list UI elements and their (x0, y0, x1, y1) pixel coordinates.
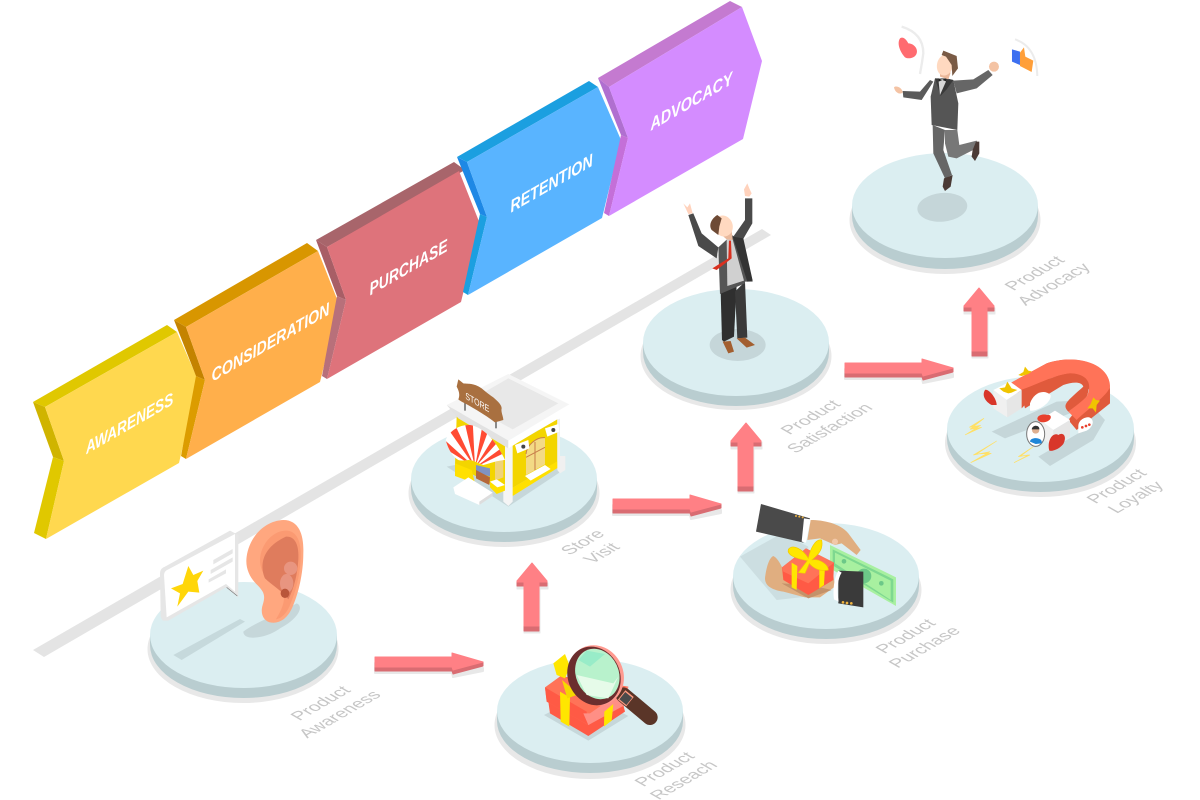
label: store visit: Store (556, 527, 609, 557)
platform: product loyalty (945, 376, 1136, 497)
arrow: research to store (517, 563, 548, 633)
stage banner: advocacy: ADVOCACY (649, 67, 735, 135)
icon: store building: STORE (465, 391, 489, 414)
stage banner: retention: RETENTION (509, 150, 594, 217)
icon: hands exchanging money for gift (740, 504, 896, 607)
label: product awareness: Awareness (293, 687, 386, 741)
stage banner: awareness (33, 325, 198, 539)
platform: store visit (408, 426, 600, 547)
stage banner: consideration (174, 243, 339, 459)
label: product loyalty: Product (1082, 466, 1151, 506)
icon: jumping businessman with heart and thumbs up (894, 27, 1037, 224)
stage banner: purchase (316, 162, 480, 379)
timeline road (33, 229, 771, 657)
platform: product research (494, 659, 686, 779)
stage banner: advocacy (598, 1, 762, 216)
stage banner: consideration: CONSIDERATION (211, 299, 331, 386)
label: product awareness (274, 676, 386, 741)
label: product awareness: Product (286, 683, 355, 723)
label: store visit: Visit (579, 540, 624, 566)
label: product purchase: Purchase (884, 624, 965, 670)
label: product advocacy: Product (1000, 253, 1069, 293)
label: product loyalty (1082, 466, 1170, 517)
label: product satisfaction: Product (776, 397, 845, 437)
icon: store building (446, 374, 569, 506)
label: product purchase: Product (871, 616, 940, 656)
label: product advocacy: Advocacy (1012, 260, 1095, 308)
label: product research: Product (630, 749, 699, 789)
icon: ear with star review card (160, 520, 303, 660)
label: product research (626, 747, 722, 800)
icon: horseshoe magnet attracting customers (965, 359, 1110, 466)
arrow: loyalty to advocacy (964, 288, 995, 358)
arrow: store to purchase (613, 495, 721, 519)
platform: product satisfaction (640, 289, 832, 410)
label: product advocacy (993, 249, 1095, 308)
label: product satisfaction (763, 389, 877, 456)
arrow: purchase to satisfaction (731, 423, 762, 493)
label: product purchase (865, 613, 965, 670)
label: store visit (556, 527, 628, 568)
stage banner: awareness: AWARENESS (84, 388, 175, 459)
label: product loyalty: Loyalty (1103, 478, 1168, 516)
icon: gift under magnifying glass (544, 636, 650, 741)
label: product satisfaction: Satisfaction (782, 400, 877, 456)
platform: product awareness (148, 582, 338, 703)
platform: product purchase (730, 523, 922, 644)
stage banner: purchase: PURCHASE (369, 235, 449, 299)
arrow: satisfaction to loyalty (845, 359, 953, 383)
platform: product advocacy (850, 153, 1040, 274)
icon: happy businessman arms raised (683, 183, 766, 361)
stage banner: retention (457, 81, 621, 295)
arrow: awareness to research (375, 653, 483, 677)
